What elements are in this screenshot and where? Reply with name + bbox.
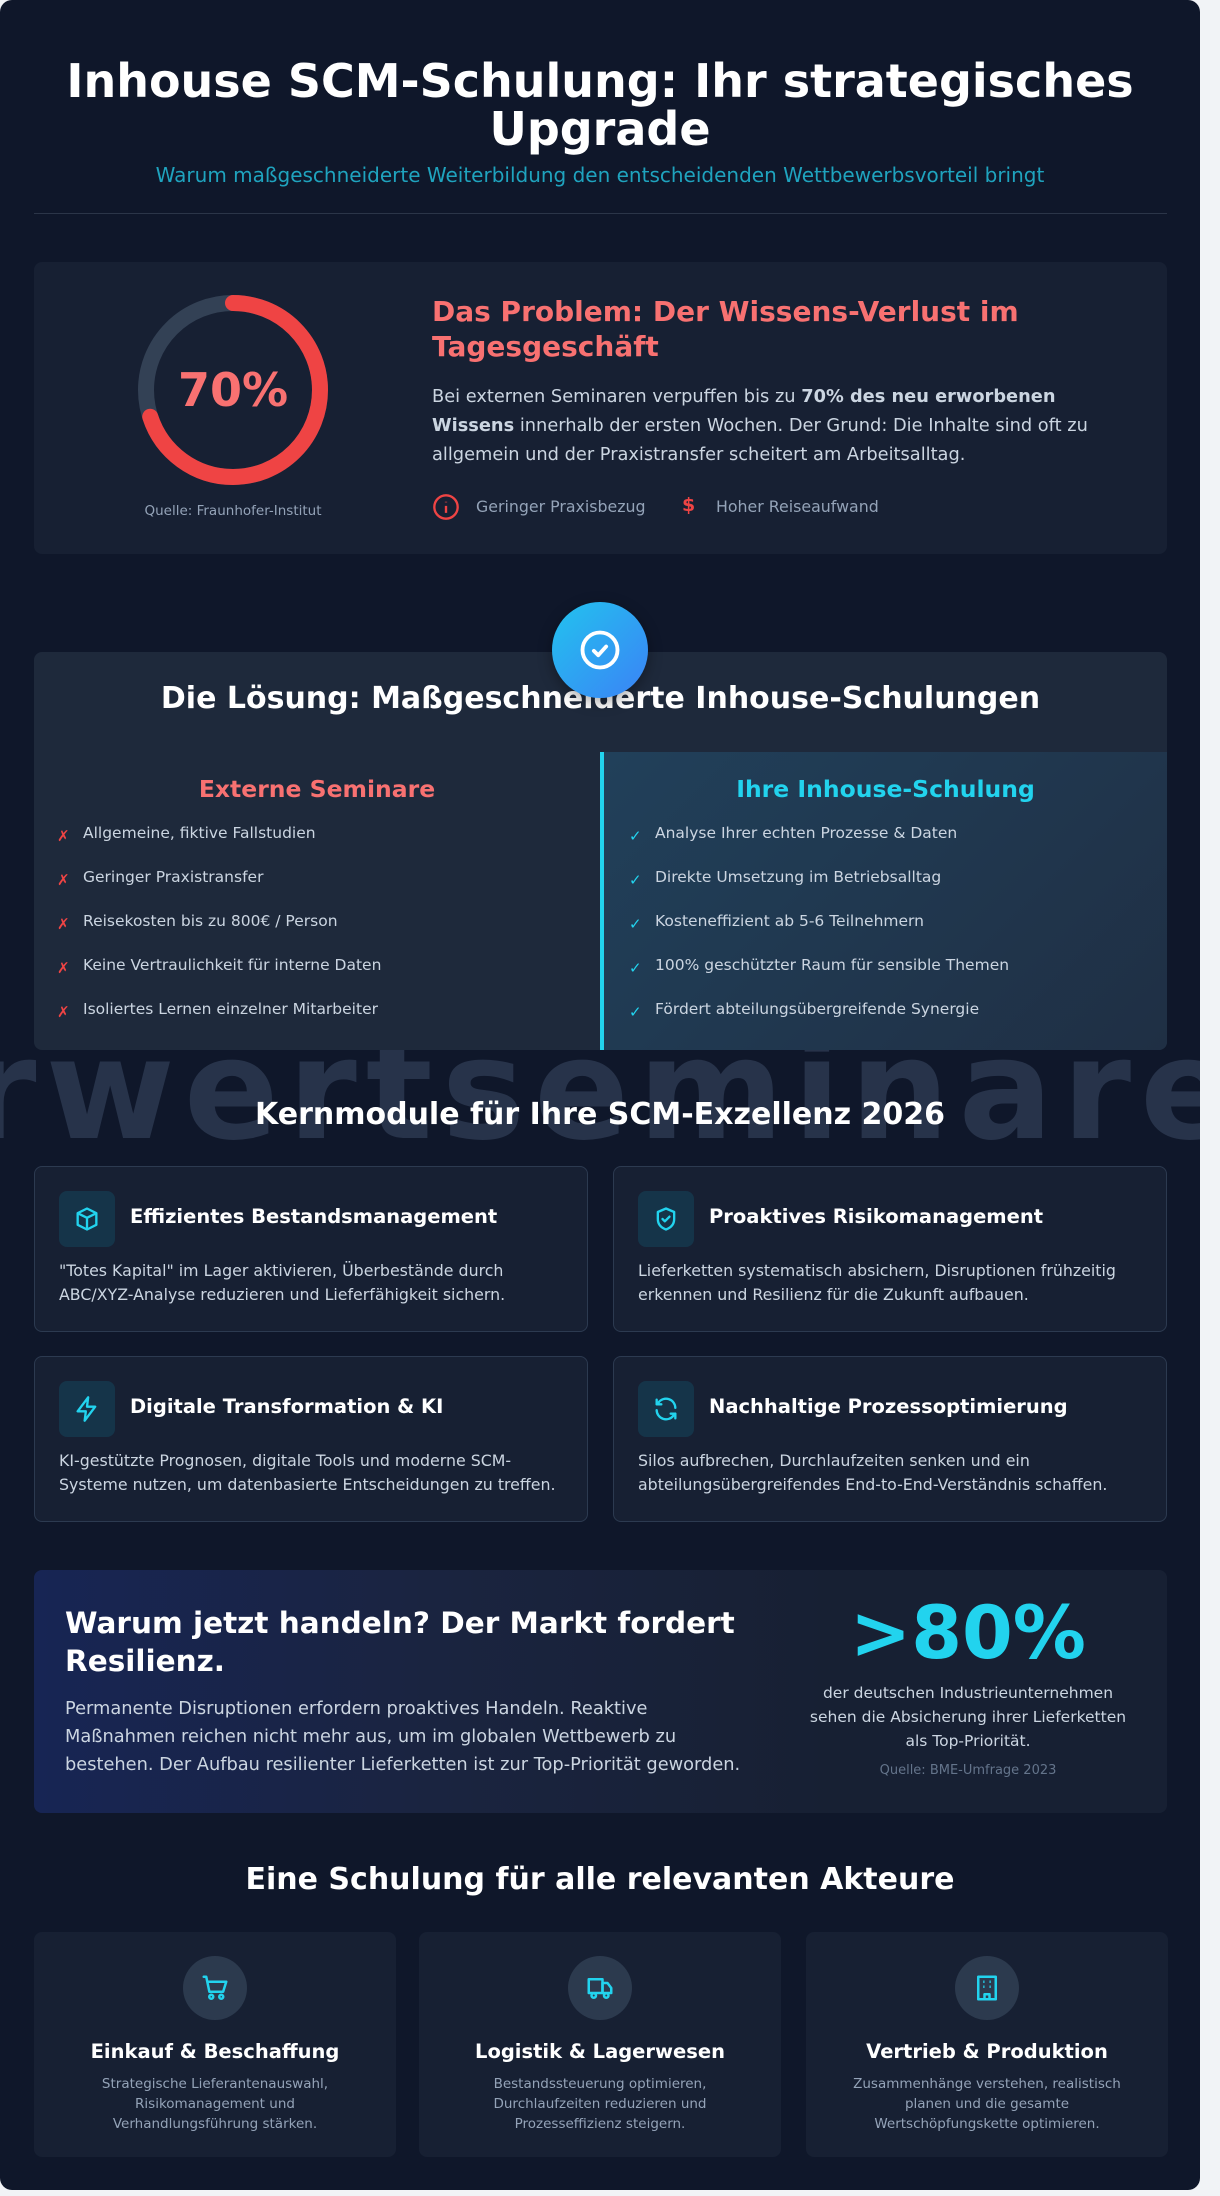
icon: lightning	[59, 1381, 115, 1437]
problem heading	[432, 295, 1019, 363]
card: logistik	[419, 1932, 781, 2157]
card: bestandsmanagement: ABC/XYZ-Analyse reduzieren und Lieferfähigkeit sichern.	[59, 1285, 505, 1304]
body: Maßnahmen reichen nicht mehr aus, um im globalen Wettbewerb zu	[65, 1726, 676, 1747]
donut chart 70%	[138, 295, 328, 485]
stat >80%	[810, 1591, 1126, 1778]
column: inhouse: Analyse Ihrer echten Prozesse & Daten	[655, 824, 957, 842]
card: bestandsmanagement	[34, 1166, 588, 1332]
column: inhouse: Ihre Inhouse-Schulung	[736, 775, 1035, 803]
card: risikomanagement	[613, 1166, 1167, 1332]
icon: refresh	[638, 1381, 694, 1437]
body: bestehen. Der Aufbau resilienter Lieferketten ist zur Top-Priorität geworden.	[65, 1754, 740, 1775]
panel: warum jetzt	[34, 1570, 1167, 1813]
card: digitale transformation: Digitale Transformation & KI	[130, 1395, 443, 1418]
heading: akteure: Eine Schulung für alle relevanten Akteure	[246, 1862, 954, 1897]
icon row: Hoher Reiseaufwand	[716, 497, 879, 516]
card: einkauf: Strategische Lieferantenauswahl, Risikomanagement und Verhandlungsführung stärken.	[102, 2076, 328, 2132]
heading: Warum jetzt handeln? Der Markt fordert	[65, 1606, 735, 1640]
heading: kernmodule: Kernmodule für Ihre SCM-Exzellenz 2026	[255, 1097, 945, 1132]
icon: dollar: $	[682, 494, 695, 516]
column: inhouse: ✓	[629, 959, 642, 977]
column: externe seminare: Allgemeine, fiktive Fallstudien	[83, 824, 316, 842]
card: bestandsmanagement: "Totes Kapital" im Lager aktivieren, Überbestände durch	[59, 1261, 503, 1280]
icon: check circle badge	[552, 602, 648, 698]
column: inhouse: ✓	[629, 827, 642, 845]
icon: info	[433, 494, 459, 520]
icon: cart	[183, 1956, 247, 2020]
card: prozessoptimierung: Nachhaltige Prozessoptimierung	[709, 1395, 1068, 1418]
problem heading: Das Problem: Der Wissens-Verlust im	[432, 295, 1019, 328]
donut chart 70%: 70%	[178, 363, 288, 417]
card: prozessoptimierung: abteilungsübergreifendes End-to-End-Verständnis schaffen.	[638, 1475, 1107, 1494]
problem body: Bei externen Seminaren verpuffen bis zu 70% des neu erworbenen Wissens innerhalb der ersten Wochen. Der Grund: Die Inhalte sind oft zu allgemein und der Praxistransfer scheitert am Arbeitsalltag.	[432, 386, 1088, 465]
column: externe seminare: Geringer Praxistransfer	[83, 868, 263, 886]
card: logistik: Bestandssteuerung optimieren, Durchlaufzeiten reduzieren und Prozesseffizienz steigern.	[493, 2076, 707, 2132]
card: prozessoptimierung: Silos aufbrechen, Durchlaufzeiten senken und ein	[638, 1451, 1030, 1470]
column: externe seminare: ✗	[57, 871, 70, 889]
column: inhouse: Kosteneffizient ab 5-6 Teilnehmern	[655, 912, 924, 930]
panel: problem	[34, 262, 1167, 554]
stat >80%: Quelle: BME-Umfrage 2023	[880, 1763, 1056, 1778]
icon row: Geringer Praxisbezug	[476, 497, 646, 516]
card: einkauf: Einkauf & Beschaffung	[91, 2040, 339, 2063]
column: inhouse: ✓	[629, 915, 642, 933]
card: digitale transformation: KI-gestützte Prognosen, digitale Tools und moderne SCM-	[59, 1451, 511, 1470]
card: prozessoptimierung	[613, 1356, 1167, 1522]
column: inhouse	[600, 752, 1167, 1050]
body: Permanente Disruptionen erfordern proaktives Handeln. Reaktive	[65, 1698, 647, 1719]
stat >80%: der deutschen Industrieunternehmen sehen die Absicherung ihrer Lieferketten als Top-Priorität.	[810, 1684, 1126, 1750]
source: Quelle: Fraunhofer-Institut	[144, 503, 322, 519]
column: externe seminare: Keine Vertraulichkeit für interne Daten	[83, 956, 381, 974]
column: externe seminare: Externe Seminare	[199, 775, 435, 803]
column: inhouse: Direkte Umsetzung im Betriebsalltag	[655, 868, 941, 886]
column: externe seminare: ✗	[57, 827, 70, 845]
card: vertrieb: Vertrieb & Produktion	[866, 2040, 1108, 2063]
card: vertrieb: Zusammenhänge verstehen, realistisch planen und die gesamte Wertschöpfungskette optimieren.	[853, 2076, 1121, 2132]
icon: box	[59, 1191, 115, 1247]
subtitle: Warum maßgeschneiderte Weiterbildung den entscheidenden Wettbewerbsvorteil bringt	[156, 163, 1044, 187]
column: inhouse: ✓	[629, 871, 642, 889]
heading: Resilienz.	[65, 1644, 225, 1678]
card: risikomanagement: erkennen und Resilienz für die Zukunft aufbauen.	[638, 1285, 1029, 1304]
column: externe seminare	[57, 775, 435, 1021]
column: inhouse: Fördert abteilungsübergreifende Synergie	[655, 1000, 979, 1018]
icon: building	[955, 1956, 1019, 2020]
column: externe seminare: ✗	[57, 959, 70, 977]
panel: solution	[34, 652, 1167, 1050]
problem heading: Tagesgeschäft	[432, 330, 659, 363]
card: einkauf	[34, 1932, 396, 2157]
title: Inhouse SCM-Schulung: Ihr strategisches	[66, 54, 1134, 108]
column: externe seminare: ✗	[57, 1003, 70, 1021]
column: inhouse: 100% geschützter Raum für sensible Themen	[655, 956, 1009, 974]
card: risikomanagement: Proaktives Risikomanagement	[709, 1205, 1043, 1228]
column: externe seminare: Isoliertes Lernen einzelner Mitarbeiter	[83, 1000, 378, 1018]
heading	[65, 1606, 735, 1678]
card: logistik: Logistik & Lagerwesen	[475, 2040, 725, 2063]
card: bestandsmanagement: Effizientes Bestandsmanagement	[130, 1205, 497, 1228]
card: vertrieb	[806, 1932, 1168, 2157]
icon row	[433, 494, 879, 520]
icon: shield	[638, 1191, 694, 1247]
title: Upgrade	[489, 102, 711, 156]
card: risikomanagement: Lieferketten systematisch absichern, Disruptionen frühzeitig	[638, 1261, 1116, 1280]
body	[65, 1698, 740, 1775]
column: inhouse: ✓	[629, 1003, 642, 1021]
icon: truck	[568, 1956, 632, 2020]
stat >80%: >80%	[850, 1591, 1086, 1676]
title	[66, 54, 1134, 156]
card: digitale transformation	[34, 1356, 588, 1522]
column: externe seminare: ✗	[57, 915, 70, 933]
column: externe seminare: Reisekosten bis zu 800€ / Person	[83, 912, 338, 930]
solution heading: Die Lösung: Maßgeschneiderte Inhouse-Schulungen	[161, 681, 1040, 716]
card: digitale transformation: Systeme nutzen, um datenbasierte Entscheidungen zu treffen.	[59, 1475, 556, 1494]
